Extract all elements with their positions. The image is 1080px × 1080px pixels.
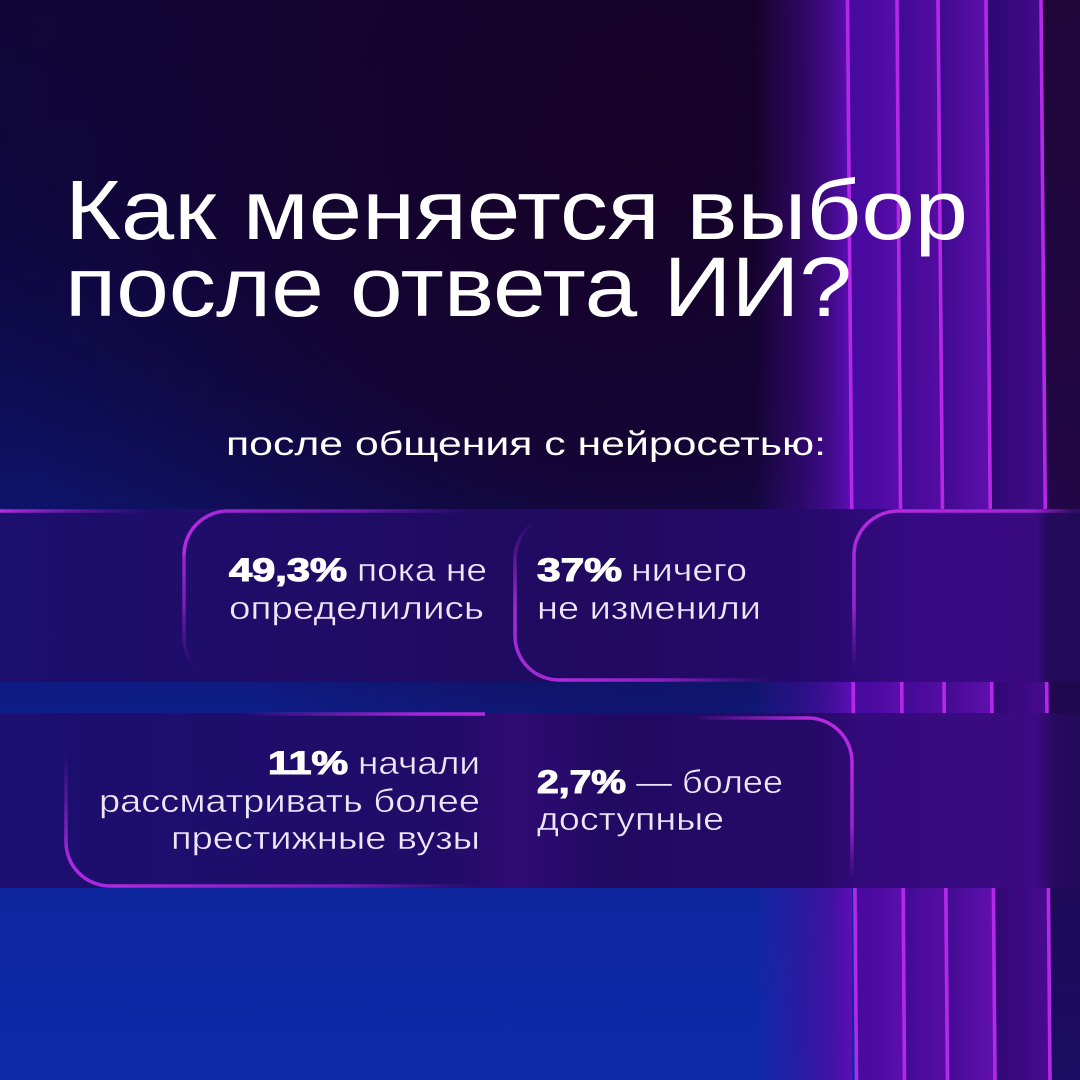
- card: 49,3%: 49,3%: [229, 552, 347, 588]
- card: 37%: ничего: [631, 552, 747, 588]
- neon vertical stripes: [755, 0, 1080, 1080]
- subtitle: после общения с нейросетью:: [226, 425, 826, 462]
- card: 11%: рассматривать более: [99, 783, 480, 819]
- title: после ответа ИИ?: [65, 240, 852, 334]
- title: Как меняется выбор: [65, 163, 968, 257]
- top edge line: [0, 509, 150, 513]
- card: 49,3%: определились: [229, 590, 484, 626]
- card: 49,3%: [184, 511, 487, 675]
- card: 37%: [515, 524, 770, 680]
- card: 2,7%: [537, 718, 852, 875]
- card: 11%: престижные вузы: [171, 820, 480, 856]
- panel: top row band: [0, 509, 1080, 682]
- title: [65, 163, 968, 334]
- card: 2,7%: — более: [636, 764, 783, 800]
- card: 11%: начали: [358, 745, 480, 781]
- card: 2,7%: доступные: [537, 801, 724, 837]
- card: 37%: 37%: [537, 552, 622, 588]
- panel: bottom row band: [0, 713, 1080, 888]
- card: 2,7%: 2,7%: [537, 764, 626, 800]
- card: 11%: 11%: [268, 745, 348, 781]
- card: 11%: [66, 714, 485, 886]
- card: empty decorative: [854, 511, 1080, 670]
- card: 49,3%: пока не: [357, 552, 487, 588]
- card: 37%: не изменили: [537, 590, 761, 626]
